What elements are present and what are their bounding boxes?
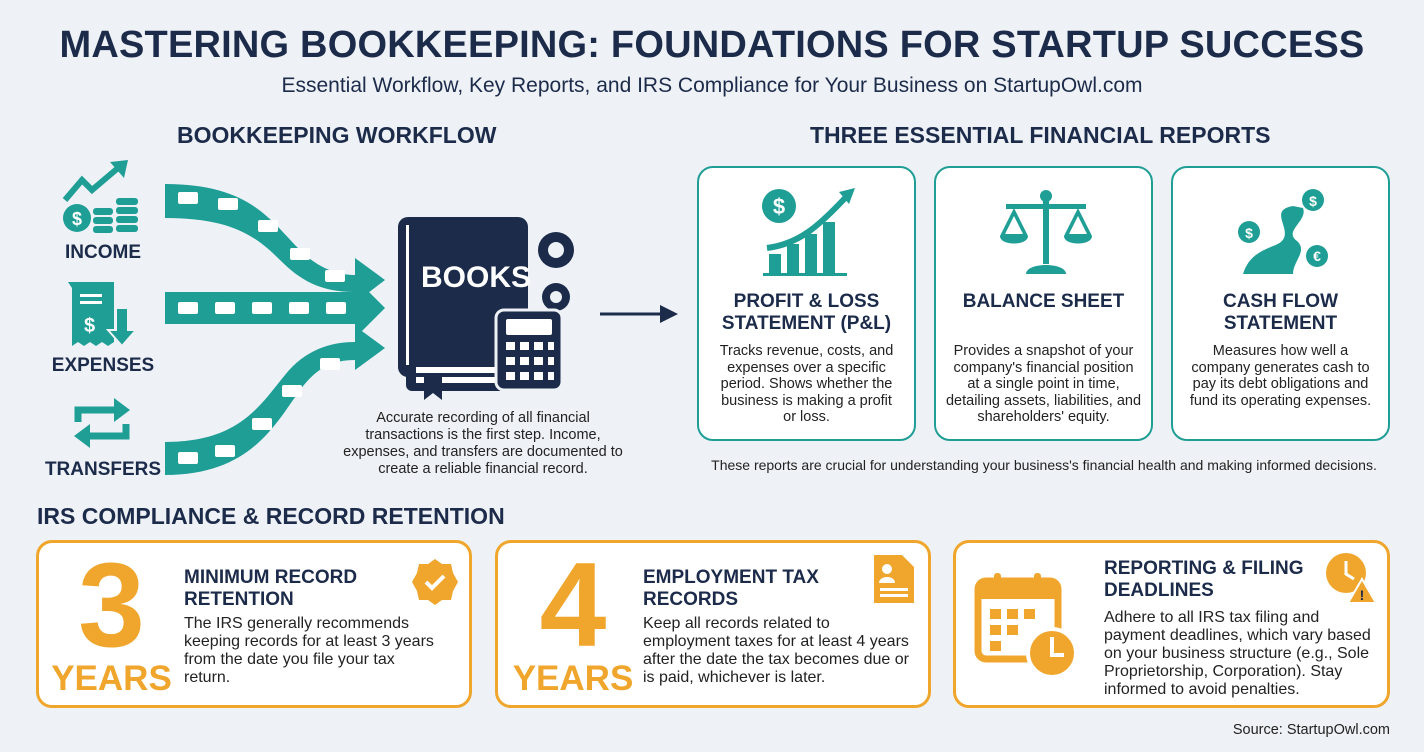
icon: P&L chart — [762, 188, 855, 276]
icon: books with calculator and gears — [398, 217, 574, 400]
big number 3 years: YEARS — [51, 659, 172, 698]
panel: balance sheet: BALANCE SHEET — [963, 291, 1124, 312]
text: workflow description: Accurate recording of all financial transactions is the first step. Income, expenses, and transfers are documented to create a reliable financial record. — [343, 410, 623, 477]
panel: profit & loss: STATEMENT (P&L) — [722, 313, 891, 334]
icon: expenses: $ — [84, 315, 95, 337]
icon: cash flow river: $ — [1245, 225, 1253, 241]
icon: calendar clock — [974, 573, 1074, 675]
icon: cash flow river: $ — [1309, 193, 1317, 209]
source: Source: StartupOwl.com — [1233, 722, 1390, 738]
label: expenses: EXPENSES — [52, 355, 154, 376]
label: transfers: TRANSFERS — [45, 459, 161, 480]
panel: 4 years: EMPLOYMENT TAX — [643, 567, 819, 588]
panel: profit & loss: Tracks revenue, costs, and expenses over a specific period. Shows whether the business is making a profit or loss. — [720, 343, 893, 425]
big number 3 years — [51, 538, 172, 698]
big number 4 years: 4 — [540, 538, 606, 672]
icon: cash flow river: € — [1313, 248, 1321, 264]
panel: balance sheet — [934, 166, 1153, 441]
panel: profit & loss: PROFIT & LOSS — [734, 291, 879, 312]
label: income: INCOME — [65, 242, 141, 263]
icon: income: $ — [72, 209, 82, 229]
big number 4 years — [513, 538, 633, 698]
icon: transfers — [74, 398, 130, 448]
text: reports footnote: These reports are crucial for understanding your business's financial health and making informed decisions. — [711, 457, 1377, 473]
panel: 3 years: RETENTION — [184, 589, 294, 610]
panel: 4 years: Keep all records related to employment taxes for at least 4 years after the date the tax becomes due or is paid, whichever is later. — [643, 615, 909, 686]
panel: reporting deadlines: Adhere to all IRS tax filing and payment deadlines, which vary based on your business structure (e.g., Sole Proprietorship, Corporation). Stay informed to avoid penalties. — [1104, 609, 1371, 698]
icon: scales — [1000, 190, 1092, 274]
icon: check badge — [412, 559, 458, 605]
panel: reporting deadlines — [953, 540, 1390, 708]
icon: clock warning: ! — [1360, 587, 1364, 603]
panel: reporting deadlines: DEADLINES — [1104, 580, 1214, 601]
panel: cash flow: Measures how well a company generates cash to pay its debt obligations and fund its operating expenses. — [1190, 343, 1371, 408]
icon: cash flow river — [1238, 189, 1328, 274]
panel: 3 years: MINIMUM RECORD — [184, 567, 357, 588]
heading: IRS compliance: IRS COMPLIANCE & RECORD RETENTION — [37, 503, 505, 529]
panel: 4 years — [495, 540, 931, 708]
panel: profit & loss — [697, 166, 916, 441]
panel: 4 years: RECORDS — [643, 589, 738, 610]
panel: 3 years: The IRS generally recommends keeping records for at least 3 years from the date you file your tax return. — [184, 615, 434, 686]
big number 4 years: YEARS — [513, 659, 633, 698]
panel: cash flow: CASH FLOW — [1223, 291, 1338, 312]
icon: income — [62, 160, 138, 233]
icon: clock warning — [1326, 553, 1374, 603]
icon: employee document — [874, 555, 914, 603]
panel: balance sheet: Provides a snapshot of your company's financial position at a single point in time, detailing assets, liabilities, and shareholders' equity. — [946, 343, 1141, 425]
panel: cash flow: STATEMENT — [1224, 313, 1337, 334]
title: MASTERING BOOKKEEPING: FOUNDATIONS FOR STARTUP SUCCESS — [60, 24, 1364, 66]
icon: expenses — [68, 282, 134, 346]
panel: reporting deadlines: REPORTING & FILING — [1104, 558, 1304, 579]
heading: bookkeeping workflow: BOOKKEEPING WORKFLOW — [177, 122, 496, 148]
arrows: money flows — [165, 184, 385, 475]
panel: cash flow — [1171, 166, 1390, 441]
panel: 3 years — [36, 540, 472, 708]
icon: P&L chart: $ — [773, 194, 785, 219]
big number 3 years: 3 — [78, 538, 145, 672]
icon: books with calculator and gears: BOOKS — [421, 261, 531, 294]
subtitle: Essential Workflow, Key Reports, and IRS Compliance for Your Business on StartupOwl.com — [281, 74, 1142, 97]
arrow: to reports — [600, 305, 678, 323]
heading: three reports: THREE ESSENTIAL FINANCIAL REPORTS — [810, 122, 1270, 148]
